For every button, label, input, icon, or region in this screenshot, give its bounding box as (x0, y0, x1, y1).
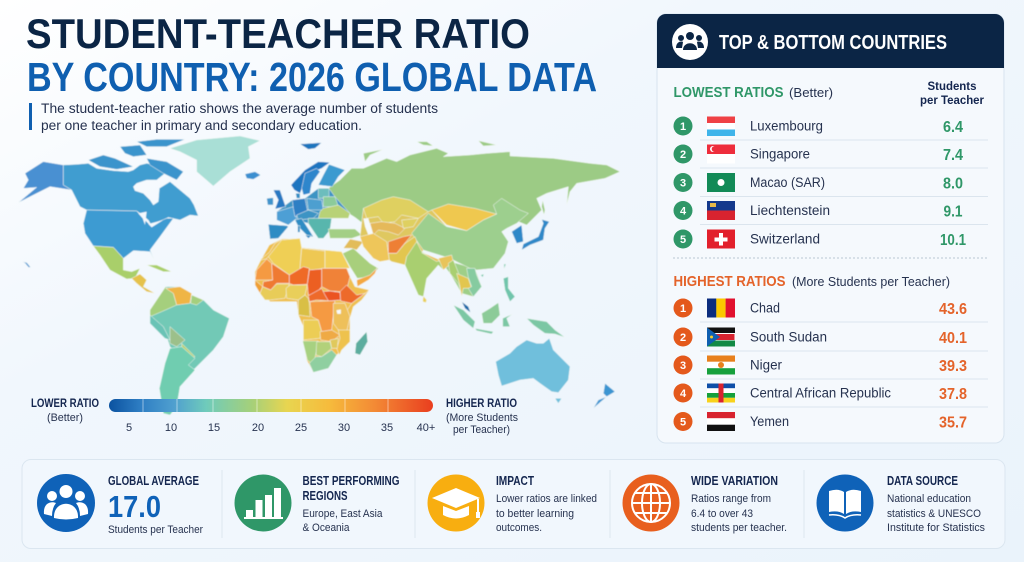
row: South Sudan: 2 (680, 332, 686, 344)
row: Central African Republic: Central African Republic (750, 386, 891, 400)
stat: wide variation: 6.4 to over 43 (691, 508, 753, 520)
legend: colour scale (31, 396, 518, 436)
lowest ratios heading: (Better) (789, 85, 833, 100)
row: Singapore: 7.4 (943, 147, 963, 164)
row: Yemen: 5 (680, 416, 686, 428)
row: Switzerland (674, 230, 966, 249)
legend tick labels: 40+ (417, 422, 435, 434)
column heading: per Teacher (920, 93, 984, 107)
title: BY COUNTRY: 2026 GLOBAL DATA (27, 54, 597, 100)
icon: graduation cap (428, 474, 484, 532)
row: Singapore: Singapore (750, 146, 810, 162)
legend label: lower ratio: (Better) (47, 412, 83, 424)
legend label: lower ratio (31, 396, 99, 424)
panel header: TOP & BOTTOM COUNTRIES (719, 32, 947, 54)
row: Liechtenstein: Liechtenstein (750, 203, 830, 218)
row: Chad: 43.6 (939, 301, 967, 318)
stat: impact (428, 474, 597, 534)
highest ratios heading: (More Students per Teacher) (792, 274, 950, 289)
row: Niger (674, 356, 967, 375)
panel header (657, 14, 1004, 68)
stat: best performing regions: BEST PERFORMING (302, 474, 400, 488)
stat: impact: IMPACT (496, 474, 534, 488)
stat: data source: National education (887, 493, 971, 505)
row: Chad: 1 (680, 303, 686, 315)
row: South Sudan: 40.1 (939, 330, 967, 347)
row: Niger: Niger (750, 358, 782, 372)
panel: summary stats (22, 460, 1005, 548)
row: Liechtenstein (674, 201, 963, 220)
legend label: higher ratio: HIGHER RATIO (446, 396, 517, 410)
row: South Sudan (674, 328, 967, 347)
row: Switzerland: 5 (680, 234, 686, 246)
legend tick labels: 20 (252, 422, 264, 434)
legend tick labels (126, 422, 435, 434)
title (26, 10, 597, 100)
row: Macao: 8.0 (943, 176, 963, 192)
row: Niger: 3 (680, 360, 686, 372)
row: South Sudan: South Sudan (750, 330, 827, 344)
subtitle text block (29, 101, 438, 133)
highest ratios heading (674, 273, 950, 290)
stat: best performing regions: & Oceania (302, 522, 350, 534)
subtitle text block: per one teacher in primary and secondary education. (41, 118, 362, 133)
row: Chad (674, 298, 967, 318)
legend tick labels: 5 (126, 422, 132, 434)
legend label: lower ratio: LOWER RATIO (31, 396, 99, 410)
row: Yemen: Yemen (750, 414, 789, 429)
legend tick labels: 10 (165, 422, 177, 434)
stat: global average: 17.0 (108, 489, 161, 524)
row: Macao: 3 (680, 178, 686, 190)
row: Switzerland: Switzerland (750, 232, 820, 246)
subtitle text block: The student-teacher ratio shows the average number of students (41, 101, 438, 116)
stat: impact: outcomes. (496, 522, 542, 534)
row: Switzerland: 10.1 (940, 232, 966, 249)
legend gradient bar (109, 399, 433, 412)
row: Luxembourg: 1 (680, 121, 686, 133)
legend tick labels: 25 (295, 422, 307, 434)
row: Liechtenstein: 9.1 (944, 204, 963, 220)
highest ratios heading: HIGHEST RATIOS (674, 273, 786, 290)
row: Central African Republic: 37.8 (939, 386, 967, 403)
row: Macao (674, 173, 963, 192)
row: Yemen (674, 412, 967, 432)
row: Luxembourg: 6.4 (943, 119, 963, 136)
legend label: higher ratio: (More Students (446, 412, 518, 424)
icon: bar chart (234, 474, 292, 532)
stat: wide variation: WIDE VARIATION (691, 474, 778, 488)
icon: open book (816, 474, 874, 532)
stat: global average: GLOBAL AVERAGE (108, 474, 199, 488)
legend tick labels: 30 (338, 422, 350, 434)
legend label: higher ratio (446, 396, 518, 436)
row: Liechtenstein: 4 (680, 206, 687, 218)
title: STUDENT-TEACHER RATIO (26, 10, 530, 57)
stat: best performing regions: Europe, East Asia (302, 508, 383, 520)
panel: top and bottom countries (657, 14, 1004, 443)
lowest ratios heading: LOWEST RATIOS (674, 84, 784, 101)
stat: impact: to better learning (496, 508, 574, 520)
stat: best performing regions: REGIONS (302, 489, 348, 503)
stat: global average (37, 474, 203, 536)
row: Singapore (674, 144, 963, 164)
stat: best performing regions (234, 474, 400, 534)
stat: impact: Lower ratios are linked (496, 493, 597, 505)
row: Luxembourg (674, 116, 963, 136)
row: Central African Republic: 4 (680, 388, 687, 400)
row: Yemen: 35.7 (939, 414, 967, 432)
legend tick labels: 35 (381, 422, 393, 434)
row: Chad: Chad (750, 300, 780, 316)
stat: data source: Institute for Statistics (887, 522, 985, 534)
icon: globe (622, 474, 680, 532)
stat: data source: statistics & UNESCO (887, 508, 981, 520)
legend tick labels: 15 (208, 422, 220, 434)
column heading (920, 79, 984, 107)
stat: data source (816, 474, 985, 534)
stat: data source: DATA SOURCE (887, 474, 958, 488)
stat: wide variation: students per teacher. (691, 522, 787, 534)
stat: global average: Students per Teacher (108, 524, 203, 536)
row: Luxembourg: Luxembourg (750, 118, 823, 134)
row: Central African Republic (674, 384, 967, 403)
row: Macao: Macao (SAR) (750, 175, 825, 190)
stat: wide variation (622, 474, 787, 534)
stat: wide variation: Ratios range from (691, 493, 771, 505)
column heading: Students (928, 79, 977, 93)
world map (18, 136, 620, 415)
row: Niger: 39.3 (939, 358, 967, 375)
legend label: higher ratio: per Teacher) (453, 424, 510, 436)
icon: people (37, 474, 95, 532)
row: Singapore: 2 (680, 149, 686, 161)
